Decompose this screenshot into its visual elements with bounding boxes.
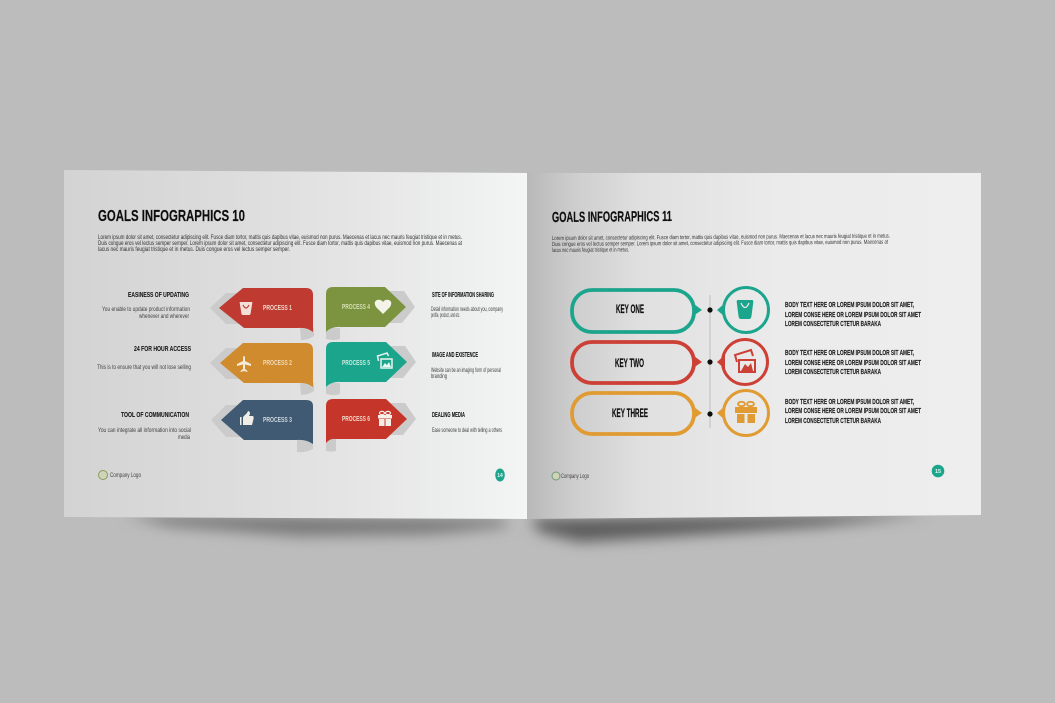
right labels: image and existence: [431, 350, 501, 380]
right labels: image and existence: IMAGE AND EXISTENCE: [432, 350, 478, 359]
right labels: dealing media: Ease someone to deal with telling a others: [432, 427, 502, 434]
left labels: tool of communication: You can integrate all information into social: [98, 427, 191, 434]
banner: process 5: PROCESS 5: [342, 360, 370, 367]
intro paragraph right: Lorem ipsum dolor sit amet, consectetur adipiscing elit. Fusce diam tortor, mattis quis dapibus vitae, euismod non purus. Maecenas et lacus nec mauris feugiat tristique et in metus.: [552, 234, 890, 242]
page number 14: 14: [497, 473, 503, 479]
icon: airplane: [237, 356, 251, 372]
key one pill: KEY ONE: [616, 304, 644, 316]
right labels: dealing media: DEALING MEDIA: [432, 410, 465, 419]
intro paragraph left: [98, 235, 462, 253]
page shadow: [125, 514, 930, 542]
body text one: LOREM CONSECTETUR CTETUR BARAKA: [785, 321, 881, 328]
right labels: image and existence: Website can be an imaging form of personal: [431, 367, 501, 374]
left labels: 24 for hour access: [97, 344, 191, 371]
left labels: tool of communication: [98, 410, 191, 441]
body text three: BODY TEXT HERE OR LOREM IPSUM DOLOR SIT AMET,: [785, 399, 914, 406]
body text one: LOREM CONSE HERE OR LOREM IPSUM DOLOR SIT AMET: [785, 312, 921, 319]
body text two: LOREM CONSE HERE OR LOREM IPSUM DOLOR SIT AMET: [785, 360, 921, 367]
company logo right: [552, 472, 589, 480]
panel: right page content: [552, 209, 944, 480]
banner: process 3: [211, 400, 313, 452]
banner: process 3: PROCESS 3: [263, 417, 292, 424]
page number 14: [495, 468, 505, 482]
key two pill: KEY TWO: [615, 358, 644, 370]
intro paragraph right: [552, 234, 890, 254]
left labels: tool of communication: TOOL OF COMMUNICATION: [121, 410, 189, 419]
right labels: dealing media: [432, 410, 502, 434]
icon circle: bag: [717, 288, 768, 332]
left labels: 24 for hour access: 24 FOR HOUR ACCESS: [134, 344, 191, 353]
left labels: 24 for hour access: This is to ensure that you will not lose selling: [97, 364, 191, 371]
company logo right: Company Logo: [561, 474, 589, 480]
intro paragraph left: Lorem ipsum dolor sit amet, consectetur adipiscing elit. Fusce diam tortor, mattis quis dapibus vitae, euismod non purus. Maecenas et lacus nec mauris feugiat tristique et in metus.: [98, 235, 462, 241]
banner: process 1: PROCESS 1: [263, 305, 292, 312]
intro paragraph right: lacus nec mauris feugiat tristique et in metus.: [552, 247, 629, 254]
right labels: site of information sharing: profile, product, and etc.: [431, 312, 460, 319]
left labels: tool of communication: media: [178, 434, 190, 441]
banner: process 6: PROCESS 6: [342, 416, 370, 423]
title: goals infographics 11: GOALS INFOGRAPHICS 11: [552, 209, 672, 226]
icon: images: [378, 353, 392, 368]
body text three: [785, 399, 921, 425]
body text two: BODY TEXT HERE OR LOREM IPSUM DOLOR SIT AMET,: [785, 350, 914, 357]
left labels: easiness of updating: whenever and wherever: [138, 313, 190, 320]
left labels: easiness of updating: EASINESS OF UPDATING: [128, 290, 189, 299]
icon circle: gift: [717, 390, 768, 436]
intro paragraph right: Duis congue eros vel lectus semper semper. Lorem ipsum dolor sit amet, consectetur adipiscing elit. Fusce diam tortor, mattis quis dapibus vitae, euismod non purus. Maecenas at: [552, 240, 888, 248]
banner: process 4: [326, 287, 415, 340]
intro paragraph left: Duis congue eros vel lectus semper semper. Lorem ipsum dolor sit amet, consectetur adipiscing elit. Fusce diam tortor, mattis quis dapibus vitae, euismod non purus. Maecenas at: [98, 241, 462, 247]
body text one: [785, 302, 921, 328]
right labels: site of information sharing: [431, 290, 503, 319]
banner: process 5: [326, 342, 416, 395]
left labels: easiness of updating: You enable to update product information: [102, 306, 190, 313]
right labels: site of information sharing: Detail information needs about you, company: [431, 306, 503, 313]
body text three: LOREM CONSECTETUR CTETUR BARAKA: [785, 418, 881, 425]
key two pill: [572, 342, 702, 383]
page number 15: 15: [935, 469, 941, 475]
icon: bag: [240, 302, 252, 315]
banner: process 2: [210, 343, 314, 395]
icon: gift: [378, 415, 392, 426]
timeline dots: [707, 307, 713, 417]
banner: process 1: [210, 288, 314, 340]
icon: heart: [375, 300, 391, 314]
banner: process 4: PROCESS 4: [342, 304, 370, 311]
right labels: image and existence: branding: [431, 373, 447, 380]
company logo left: Company Logo: [110, 473, 141, 479]
banner: process 2: PROCESS 2: [263, 360, 292, 367]
left labels: easiness of updating: [102, 290, 190, 320]
icon: thumbs up: [240, 411, 254, 425]
company logo left: [98, 470, 141, 480]
body text two: [785, 350, 921, 376]
body text three: LOREM CONSE HERE OR LOREM IPSUM DOLOR SIT AMET: [785, 408, 921, 415]
right page: [527, 173, 981, 519]
body text two: LOREM CONSECTETUR CTETUR BARAKA: [785, 369, 881, 376]
right labels: site of information sharing: SITE OF INFORMATION SHARING: [432, 290, 494, 299]
panel: left page content: [97, 208, 505, 482]
body text one: BODY TEXT HERE OR LOREM IPSUM DOLOR SIT AMET,: [785, 302, 914, 309]
icon circle: images: [717, 340, 768, 384]
key one pill: [572, 290, 702, 332]
intro paragraph left: lacus nec mauris feugiat tristique et in metus. Duis congue eros vel lectus semper semper.: [98, 247, 290, 253]
left page: [64, 170, 527, 519]
page number 15: [932, 465, 944, 477]
key three pill: KEY THREE: [612, 408, 648, 420]
banner: process 6: [326, 399, 416, 452]
key three pill: [572, 393, 702, 434]
timeline axis: [709, 295, 711, 428]
title: goals infographics 10: GOALS INFOGRAPHICS 10: [98, 208, 245, 225]
